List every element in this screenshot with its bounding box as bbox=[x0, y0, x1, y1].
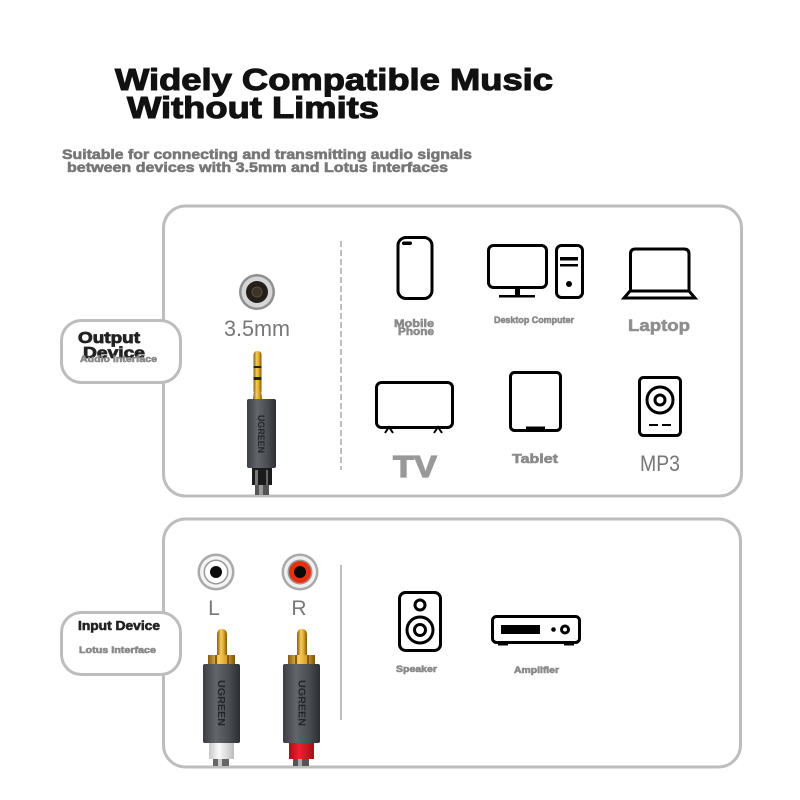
label: mobile phone bbox=[394, 318, 434, 338]
icon: R socket bbox=[282, 554, 318, 590]
3.5mm jack plug: UGREEN bbox=[256, 415, 266, 453]
label: TV: TV bbox=[393, 449, 437, 484]
label: tablet: Tablet bbox=[512, 451, 559, 466]
label: R: R bbox=[291, 597, 307, 620]
label: L: L bbox=[208, 597, 220, 620]
callout: input device: Lotus Interface bbox=[79, 645, 156, 655]
label: mobile phone: Phone bbox=[398, 326, 434, 338]
panel: output devices bbox=[164, 206, 742, 496]
callout: output device: Audio Interface bbox=[80, 354, 157, 364]
title: Without Limits bbox=[127, 90, 379, 125]
icon: amplifier bbox=[492, 616, 580, 646]
white RCA plug: UGREEN bbox=[215, 680, 226, 726]
icon: TV bbox=[376, 382, 452, 433]
label: amplifier: Amplifier bbox=[514, 665, 560, 675]
callout: output device bbox=[62, 320, 180, 382]
subtitle: Suitable for connecting and transmitting audio signals bbox=[62, 146, 472, 162]
label: laptop: Laptop bbox=[628, 316, 690, 335]
title bbox=[115, 62, 553, 125]
label: mobile phone: Mobile bbox=[394, 318, 434, 330]
icon: desktop computer bbox=[488, 246, 582, 298]
subtitle bbox=[62, 146, 472, 175]
icon: MP3 player bbox=[640, 378, 680, 436]
white RCA plug bbox=[203, 629, 240, 766]
label: 3.5mm: 3.5mm bbox=[224, 316, 290, 341]
icon: 3.5mm socket bbox=[239, 274, 275, 310]
icon: laptop bbox=[624, 249, 695, 298]
icon: mobile phone bbox=[398, 238, 432, 298]
subtitle: between devices with 3.5mm and Lotus interfaces bbox=[67, 159, 448, 175]
divider bbox=[340, 565, 342, 720]
label: speaker: Speaker bbox=[396, 664, 438, 674]
icon: tablet bbox=[510, 372, 560, 430]
icon: L socket bbox=[198, 554, 234, 590]
3.5mm jack plug bbox=[247, 351, 276, 495]
panel: input devices bbox=[164, 519, 740, 767]
red RCA plug: UGREEN bbox=[296, 680, 306, 726]
callout: input device: Input Device bbox=[78, 619, 160, 633]
callout: output device: Device bbox=[83, 345, 145, 362]
red RCA plug bbox=[283, 629, 320, 766]
callout: output device: Output bbox=[78, 330, 141, 347]
title: Widely Compatible Music bbox=[115, 62, 553, 97]
label: MP3: MP3 bbox=[640, 451, 680, 476]
icon: speaker bbox=[400, 592, 440, 650]
label: desktop computer: Desktop Computer bbox=[494, 315, 574, 325]
divider bbox=[340, 241, 342, 470]
callout: input device bbox=[62, 612, 180, 674]
